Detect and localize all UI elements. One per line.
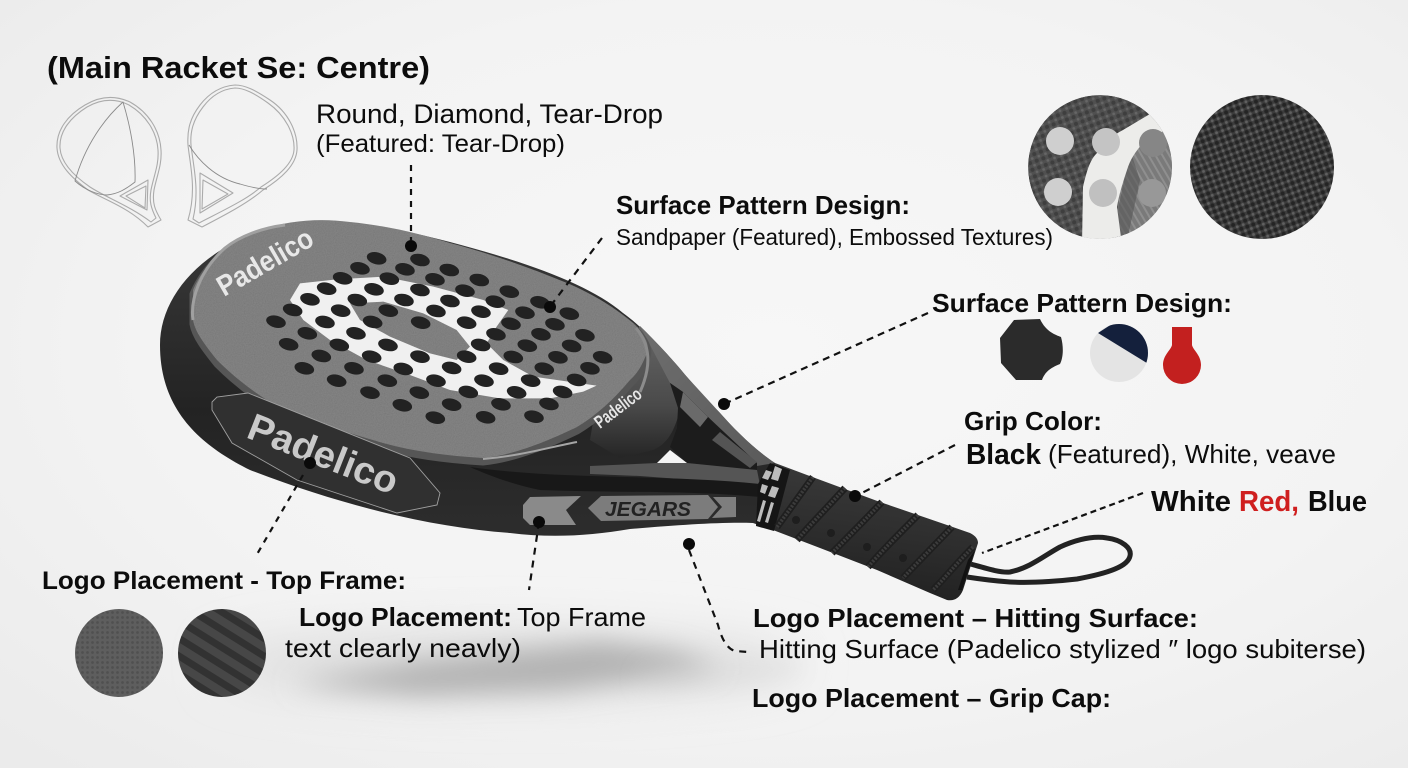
text: grip cap logo: Logo Placement – Grip Cap: (752, 683, 1111, 713)
main title: (Main Racket Se: Centre) (47, 50, 430, 85)
handle badge text: JEGARS (605, 499, 692, 521)
text: logo placement: Top Frame (517, 602, 646, 632)
text: strap colours: Blue (1308, 486, 1367, 518)
swatch: navy and white (1090, 324, 1148, 382)
leader: hitting surface logo (683, 538, 748, 652)
handle chevron (712, 497, 736, 518)
text: hitting surface logo: Hitting Surface (Padelico stylized ″ logo subiterse) (759, 634, 1366, 664)
throat outer band (640, 326, 775, 466)
icon: diamond racket outline (57, 97, 161, 227)
text: strap colours: White (1151, 486, 1231, 518)
swatch: carbon stripes (178, 609, 266, 697)
text: grip colour: Black (966, 439, 1042, 471)
leader: strap colours (982, 493, 1143, 553)
lower throat bar (590, 463, 760, 485)
grip wrap (773, 463, 978, 600)
text: logo placement top frame: Logo Placement - Top Frame: (42, 567, 406, 595)
text: logo placement: Logo Placement: (299, 602, 512, 632)
racket ground shadow (220, 633, 800, 697)
throat disc behind surface (590, 326, 678, 458)
swatch: red grip cap (1163, 327, 1201, 384)
leader: throat (718, 313, 928, 410)
leader: frame logo (256, 457, 316, 556)
text: shape options: Round, Diamond, Tear-Drop (316, 99, 663, 129)
grip end hole (958, 550, 975, 590)
swatch: fine dotted texture (75, 609, 163, 697)
throat opening (657, 450, 687, 463)
swatch: surface texture mixed (1028, 95, 1172, 239)
hitting surface (193, 220, 648, 458)
text: strap colours (1151, 486, 1367, 518)
swatch: dark weave texture (1190, 95, 1334, 239)
throat highlight lower (712, 432, 757, 468)
icon: racket shape outlines (57, 85, 297, 227)
text: hitting surface logo: Logo Placement – Hitting Surface: (753, 603, 1198, 633)
text: grip colour (964, 406, 1336, 471)
text: grip colour: Grip Color: (964, 406, 1102, 436)
text: shape options: (Featured: Tear-Drop) (316, 130, 565, 158)
throat highlight upper (680, 392, 708, 427)
surface rim highlight (192, 225, 285, 320)
handle badge left (523, 496, 581, 525)
frame logo: Padelico (242, 406, 404, 503)
racket frame (160, 222, 775, 536)
handle badge centre (588, 495, 718, 521)
heading: surface pattern: Surface Pattern Design: (616, 190, 910, 220)
leader: shape (405, 165, 417, 252)
collar markings (757, 466, 782, 523)
small logo on surface: Padelico (590, 384, 646, 432)
text: hitting surface logo (753, 603, 1366, 664)
text: strap colours: Red, (1239, 486, 1299, 518)
text: logo placement (285, 602, 646, 663)
white stylized logo (290, 277, 597, 398)
hitting surface rim (193, 224, 648, 462)
perforation holes (265, 250, 614, 426)
grip ribbon texture (777, 477, 973, 590)
text: logo placement: text clearly neavly) (285, 633, 521, 663)
icon: tear-drop racket outline (188, 85, 297, 227)
text: shape options (316, 99, 663, 158)
grip small logos (792, 516, 907, 562)
grip collar (756, 463, 790, 531)
text: surface options: Sandpaper (Featured), Embossed Textures) (616, 224, 1053, 250)
logo on surface: Padelico (212, 222, 319, 303)
main racket illustration (160, 220, 1130, 600)
handle black channel (470, 467, 760, 497)
grip overwrap ribbons (777, 477, 973, 590)
frame logo plate (212, 393, 440, 513)
swatch: black grip shape (1000, 319, 1063, 380)
strap loop (967, 537, 1130, 582)
text: grip colour: (Featured), White, veave (1048, 439, 1336, 469)
leader: handle logo (529, 516, 545, 590)
throat inner dark arm (670, 383, 757, 470)
leader: grip colour (849, 445, 955, 502)
leader: surface pattern (544, 238, 602, 313)
heading: second surface pattern: Surface Pattern Design: (932, 288, 1232, 318)
